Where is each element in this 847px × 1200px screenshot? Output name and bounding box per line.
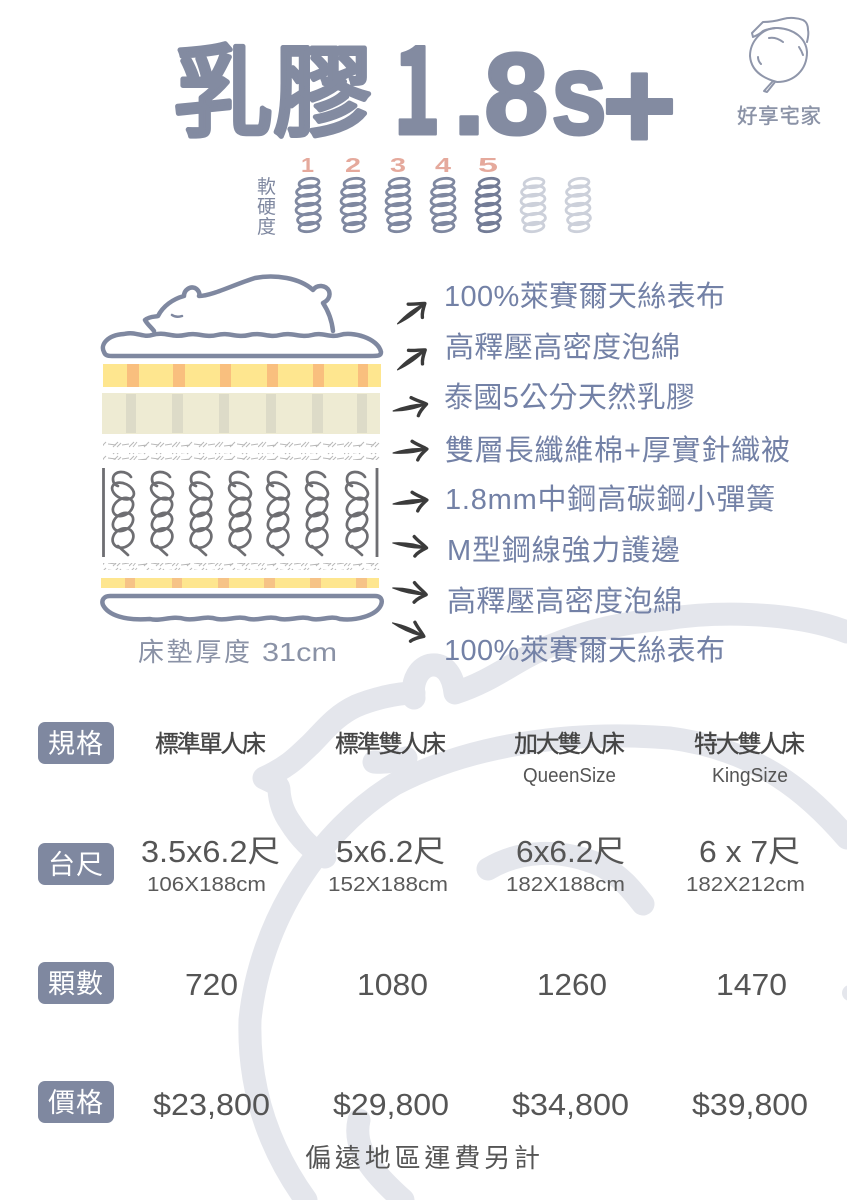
logo: bear and round body with brand name <box>737 18 821 129</box>
row: coil count <box>38 962 787 1004</box>
row: specifications: 加大雙人床 <box>514 724 625 759</box>
footnote: 偏遠地區運費另計 <box>305 1138 540 1175</box>
row: dimensions: 106X188cm <box>147 874 266 896</box>
row: dimensions <box>38 834 805 896</box>
latex layer <box>102 393 380 434</box>
row: price <box>38 1081 808 1123</box>
thickness caption: 31cm <box>262 637 337 667</box>
lower foam layer <box>101 578 379 588</box>
row: dimensions: 182X188cm <box>506 874 625 896</box>
layer labels: M型鋼線強力護邊 <box>447 534 680 567</box>
row: specifications: 標準雙人床 <box>335 724 446 759</box>
softness scale numbers: 2 <box>345 155 361 177</box>
top cushion <box>103 333 381 356</box>
row: price: $34,800 <box>512 1087 629 1122</box>
row: price: $23,800 <box>153 1087 270 1122</box>
bottom cushion <box>102 596 382 620</box>
badge <box>38 962 114 1004</box>
layer labels <box>444 280 790 667</box>
pocket springs with steel edge <box>104 468 377 557</box>
softness springs: five of seven filled <box>295 177 591 233</box>
title: . <box>453 29 485 159</box>
badge: 顆數 <box>48 962 103 1001</box>
layer labels: 1.8mm中鋼高碳鋼小彈簧 <box>445 483 775 516</box>
title: + <box>602 34 677 177</box>
row: dimensions: 182X212cm <box>686 874 805 896</box>
title: s <box>551 29 607 159</box>
fibre layers <box>103 441 380 460</box>
lower fibre layer <box>103 563 380 570</box>
row: coil count: 1470 <box>716 967 787 1002</box>
row: coil count: 1080 <box>357 967 428 1002</box>
row: price: $39,800 <box>692 1087 808 1122</box>
row: specifications <box>38 722 805 787</box>
softness label <box>257 172 276 239</box>
badge <box>38 843 114 885</box>
thickness caption: 床墊厚度 <box>138 637 250 667</box>
title: 8 <box>484 29 549 159</box>
layer labels: 100%萊賽爾天絲表布 <box>444 634 725 667</box>
row: dimensions: 5x6.2尺 <box>336 834 445 869</box>
badge: 規格 <box>48 722 103 761</box>
layer labels: 泰國5公分天然乳膠 <box>444 381 695 414</box>
softness label: 硬 <box>257 192 276 219</box>
row: specifications: QueenSize <box>523 765 616 787</box>
softness scale numbers: 4 <box>435 155 452 177</box>
badge: 台尺 <box>48 843 103 882</box>
row: dimensions: 3.5x6.2尺 <box>141 834 280 869</box>
arrows <box>389 296 431 645</box>
row: specifications: 特大雙人床 <box>694 724 805 759</box>
row: price: $29,800 <box>333 1087 449 1122</box>
badge: 價格 <box>48 1081 103 1120</box>
row: coil count: 1260 <box>537 967 607 1002</box>
logo: bear and round body with brand name: 好享宅家 <box>737 99 821 129</box>
icon: sleeping bear <box>145 276 333 331</box>
softness scale numbers: 3 <box>390 155 406 177</box>
title: 乳膠 <box>173 12 373 157</box>
title <box>173 0 677 177</box>
layer labels: 高釋壓高密度泡綿 <box>445 331 680 364</box>
softness label: 度 <box>257 212 276 239</box>
row: specifications: 標準單人床 <box>155 724 266 759</box>
badge <box>38 1081 114 1123</box>
layer labels: 100%萊賽爾天絲表布 <box>444 280 725 313</box>
row: dimensions: 152X188cm <box>328 874 448 896</box>
row: dimensions: 6x6.2尺 <box>516 834 625 869</box>
watermark: large bear outline <box>250 614 847 1200</box>
title: 1 <box>393 0 441 168</box>
mattress diagram <box>101 276 382 620</box>
row: specifications: KingSize <box>712 765 788 787</box>
yellow foam layer <box>103 364 381 387</box>
layer labels: 雙層長纖維棉+厚實針織被 <box>445 434 790 467</box>
softness label: 軟 <box>257 172 276 199</box>
softness scale numbers: 1 <box>301 155 314 177</box>
row: coil count: 720 <box>185 967 238 1002</box>
layer labels: 高釋壓高密度泡綿 <box>447 585 682 618</box>
softness scale numbers <box>301 155 498 177</box>
badge <box>38 722 114 764</box>
softness scale numbers: 5 <box>478 155 498 177</box>
row: dimensions: 6 x 7尺 <box>699 834 800 869</box>
thickness caption <box>138 637 337 667</box>
